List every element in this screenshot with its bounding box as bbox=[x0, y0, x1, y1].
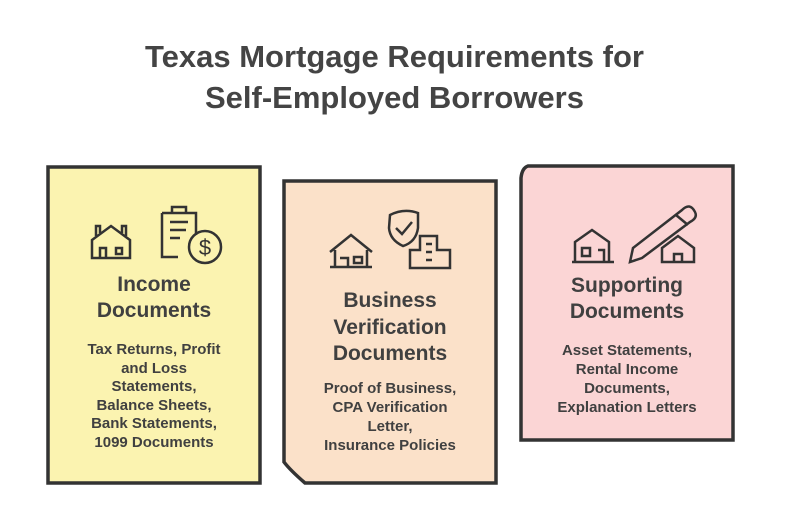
icon: house business bbox=[330, 235, 372, 267]
heading: supporting: Documents bbox=[570, 300, 684, 323]
heading: business: Business bbox=[343, 289, 437, 312]
heading: income bbox=[97, 273, 211, 322]
text: income: Tax Returns, Profit bbox=[87, 341, 221, 358]
title: Self-Employed Borrowers bbox=[205, 80, 584, 115]
text: supporting: Rental Income bbox=[576, 361, 678, 378]
heading: business: Verification bbox=[333, 316, 447, 338]
heading: income: Income bbox=[117, 273, 191, 296]
icon: house sketch bbox=[572, 230, 614, 262]
text: income: 1099 Documents bbox=[94, 434, 214, 450]
heading: income: Documents bbox=[97, 299, 211, 322]
text: income: and Loss bbox=[121, 360, 187, 376]
text: income: Statements, bbox=[111, 378, 197, 395]
heading: supporting: Supporting bbox=[571, 274, 683, 297]
text: supporting: Asset Statements, bbox=[562, 342, 692, 359]
panel: income bbox=[48, 167, 260, 483]
title bbox=[145, 39, 644, 115]
text: business: CPA Verification bbox=[332, 399, 448, 416]
text: income: Balance Sheets, bbox=[96, 396, 212, 414]
title: Texas Mortgage Requirements for bbox=[145, 39, 644, 74]
icon: houses bbox=[92, 226, 130, 258]
icon: clipboard dollar: $ bbox=[199, 235, 211, 260]
text: business bbox=[324, 380, 456, 454]
heading: supporting bbox=[570, 274, 684, 323]
text: business: Insurance Policies bbox=[324, 437, 456, 454]
text: business: Proof of Business, bbox=[324, 380, 456, 397]
text: income: Bank Statements, bbox=[91, 415, 217, 432]
text: business: Letter, bbox=[367, 418, 412, 435]
panel: supporting bbox=[521, 166, 733, 440]
text: supporting: Documents, bbox=[584, 380, 670, 397]
icon: pencil house bbox=[630, 206, 696, 262]
heading: business bbox=[333, 289, 447, 365]
text: supporting: Explanation Letters bbox=[557, 399, 697, 416]
icon: clipboard dollar bbox=[162, 207, 221, 263]
text: supporting bbox=[557, 342, 697, 416]
heading: business: Documents bbox=[333, 342, 447, 365]
panel: business bbox=[284, 181, 496, 483]
text: income bbox=[87, 341, 221, 450]
icon: shield buildings bbox=[389, 211, 450, 268]
